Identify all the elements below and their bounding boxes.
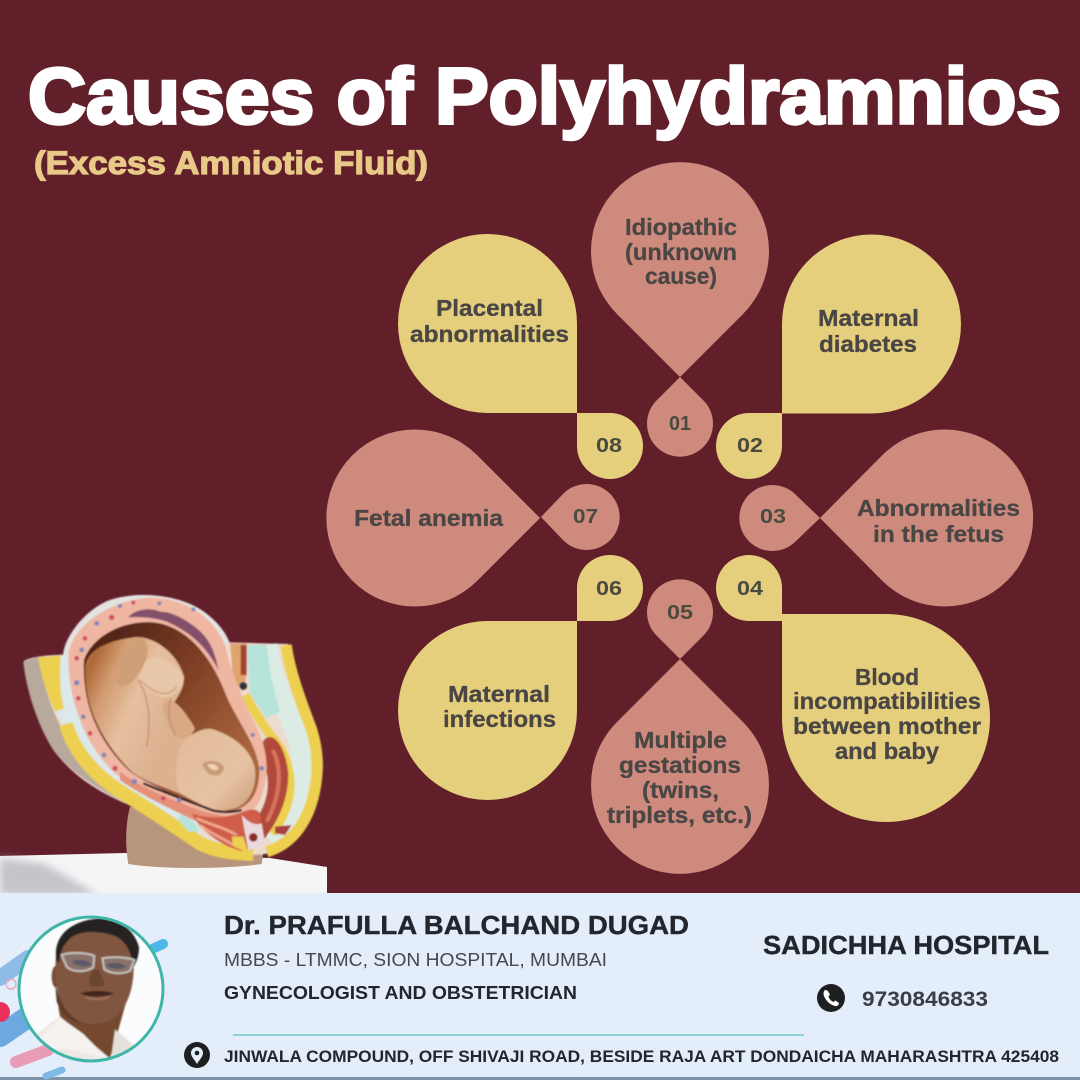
title: Causes of Polyhydramnios [28,51,1061,140]
lower organs [192,810,261,851]
petal 05: multiple gestations: gestations [619,752,741,778]
left collar [40,1018,105,1058]
divider line [233,1034,804,1036]
doctor qualification: MBBS - LTMMC, SION HOSPITAL, MUMBAI [224,950,607,970]
shirt [37,1016,134,1060]
badge 08 [577,413,643,479]
face [55,930,134,1024]
badge 01 [647,377,713,457]
yellow fat band upper left [38,655,64,712]
icon: location pin [184,1042,210,1068]
outer shell [23,595,323,855]
lower lip [86,997,109,999]
badge 03 [739,485,820,551]
badge 03: 03 [760,506,786,528]
badge 05 [647,579,713,659]
model stand [126,807,265,868]
petal 08: placental abnormalities: Placental [436,295,543,321]
icon: phone [817,984,845,1012]
back rim of shell [23,657,140,810]
glasses [62,953,134,973]
address: JINWALA COMPOUND, OFF SHIVAJI ROAD, BESIDE RAJA ART DONDAICHA MAHARASHTRA 425408 [224,1048,1059,1066]
ear [52,966,60,987]
placenta [128,609,218,670]
pale layer left [55,655,203,843]
badge 06 [577,555,643,621]
fetus body [85,637,195,797]
petal 05: multiple gestations: Multiple [634,727,727,753]
footer panel [0,893,1080,1080]
badge 08: 08 [596,435,622,457]
nose shadow [89,969,105,987]
petal 01: idiopathic: (unknown [625,239,737,265]
petal 04: blood incompatibilities: incompatibilities [793,688,981,714]
petal 01: idiopathic [591,162,769,377]
cyan column [247,645,280,718]
badge 02 [716,413,782,479]
petal 03: abnormalities in the fetus [820,430,1033,606]
petal 06: maternal infections: infections [443,706,556,732]
petal 02: maternal diabetes: diabetes [819,331,917,357]
petal 05: multiple gestations: triplets, etc.) [607,802,752,828]
yellow fat band lower [66,724,253,854]
yellow band right [267,645,317,852]
mouth [80,991,114,997]
petal 02: maternal diabetes: Maternal [818,305,919,331]
fetus limbs [116,637,195,747]
badge 07 [541,484,620,550]
white platform under the model [0,853,327,895]
fetus ear [202,761,224,776]
petal 03: abnormalities in the fetus: Abnormalities [857,495,1020,521]
petal 05: multiple gestations: (twins, [642,777,719,803]
badge 04 [716,555,782,621]
vessel dots blue [74,601,264,802]
pale layers right [267,645,302,840]
amniotic cavity [84,622,259,811]
petal 04: blood incompatibilities: and baby [835,738,939,764]
petal 04: blood incompatibilities [782,614,990,822]
badge 07: 07 [573,506,598,528]
petal 03: abnormalities in the fetus: in the fetus [873,521,1004,547]
doctor name: Dr. PRAFULLA BALCHAND DUGAD [224,910,689,940]
badge 05: 05 [667,602,693,624]
petal 08: placental abnormalities: abnormalities [410,321,569,347]
vessel dots [74,601,166,801]
petal 05: multiple gestations [591,659,769,874]
rectum organ [245,737,288,838]
illustration: uterus cross-section model [23,595,323,868]
hair [56,918,139,967]
petal 07: fetal anemia [326,430,540,606]
petal 02: maternal diabetes [782,234,961,414]
badge 04: 04 [737,578,764,600]
phone number: 9730846833 [862,988,988,1011]
petal 01: idiopathic: Idiopathic [625,214,737,240]
petal 06: maternal infections [398,621,577,800]
petal 01: idiopathic: cause) [645,263,717,289]
fetus head [176,729,255,810]
inner yellow band right [245,695,290,833]
petal 04: blood incompatibilities: between mother [793,713,981,739]
petal 08: placental abnormalities [398,234,577,413]
petal 04: blood incompatibilities: Blood [855,664,919,690]
neck [58,1000,127,1058]
eyes [72,960,127,969]
decorative streaks behind portrait [0,944,163,1076]
badge 01: 01 [669,413,691,435]
petal 07: fetal anemia: Fetal anemia [354,505,503,531]
petal 06: maternal infections: Maternal [448,681,550,707]
hospital name: SADICHHA HOSPITAL [763,930,1049,960]
right collar [111,1028,130,1056]
panel: causes petal diagram [326,162,1033,874]
salmon lower wall [120,772,233,822]
doctor portrait [19,917,163,1067]
subtitle: (Excess Amniotic Fluid) [34,145,428,181]
doctor speciality: GYNECOLOGIST AND OBSTETRICIAN [224,983,577,1003]
badge 06: 06 [596,578,622,600]
white rim of uterus [63,595,229,657]
black shadow under fetus [143,783,242,812]
cheek shadow [54,985,82,1024]
uterine wall [68,597,267,821]
badge 02: 02 [737,435,763,457]
